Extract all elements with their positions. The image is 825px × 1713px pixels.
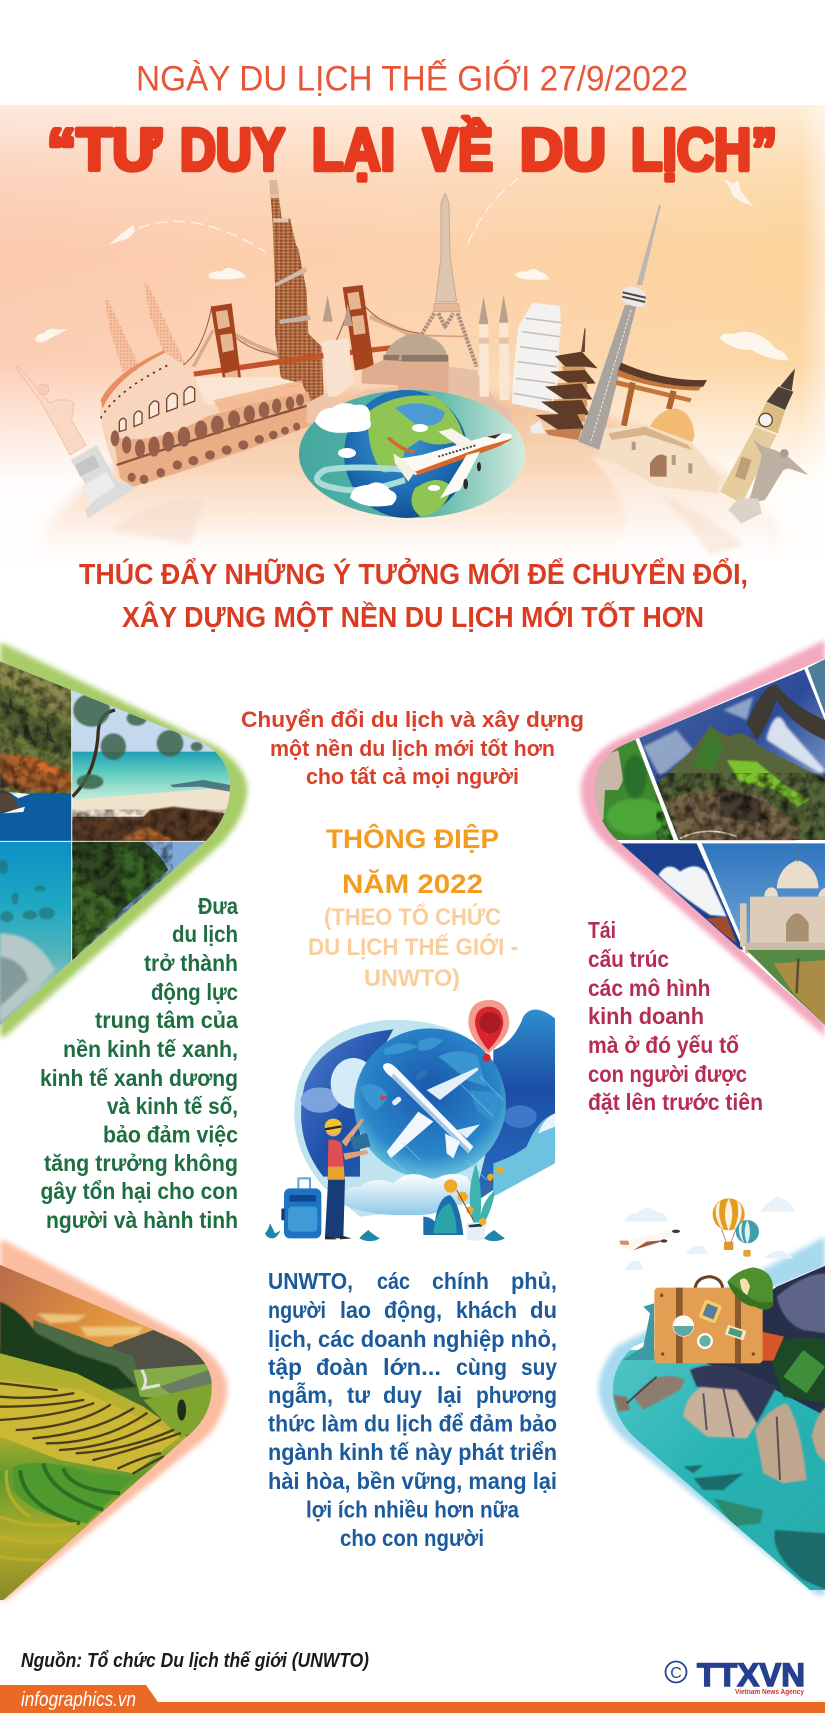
icon: globe with airplane <box>299 390 525 518</box>
icon: clouds left <box>35 268 246 342</box>
text: green economy message: trung tâm của <box>95 1007 238 1033</box>
text: UNWTO attribution <box>308 903 518 992</box>
submerged reef <box>683 1465 825 1590</box>
text: green economy message: tăng trưởng không <box>44 1150 238 1176</box>
title: main slogan: LỊCH” <box>631 117 777 183</box>
clouds <box>315 403 440 506</box>
line 1: các <box>377 1268 410 1294</box>
photo collage <box>0 662 230 1025</box>
clouds behind globe <box>301 1058 537 1128</box>
green chevron border <box>0 643 247 1037</box>
line 4: tập <box>268 1354 302 1380</box>
logo: TTXVN <box>666 1657 805 1696</box>
line 4: suy <box>521 1354 557 1380</box>
line 5: duy <box>383 1382 422 1408</box>
blue chevron border <box>598 1237 825 1595</box>
icon: red map pin <box>468 1000 509 1062</box>
icon: small airplane <box>619 1230 681 1252</box>
photo: Machu Picchu <box>638 668 825 840</box>
line 2 <box>268 1297 557 1323</box>
swirl dark blue <box>301 1029 393 1177</box>
photo: coral reef aerial <box>0 842 72 1028</box>
landmark: Hagia Sophia left side <box>307 295 420 423</box>
text: business model message: cấu trúc <box>588 946 669 972</box>
line 5: phương <box>476 1382 557 1408</box>
text: red headline message <box>241 707 584 789</box>
tagline: Vietnam News Agency <box>735 1687 805 1696</box>
heading: message 2022: THÔNG ĐIỆP <box>326 824 499 854</box>
rock texture <box>72 810 232 842</box>
icon: suitcase with stickers <box>623 1277 784 1363</box>
heading: message 2022 <box>326 824 499 899</box>
continents <box>368 395 464 516</box>
terraces <box>0 1353 187 1600</box>
suitcase <box>281 1178 321 1238</box>
text: business model message: kinh doanh <box>588 1003 704 1029</box>
line 7: ngành kinh tế này phát triển <box>268 1439 557 1465</box>
landmark: Petronas towers <box>105 283 187 372</box>
line 2: người <box>268 1297 326 1323</box>
text: business model message: đặt lên trước tiên <box>588 1089 763 1115</box>
text: UNWTO attribution: DU LỊCH THẾ GIỚI - <box>308 933 518 961</box>
ruin texture <box>657 773 825 840</box>
dark rocks top <box>705 1266 825 1414</box>
granite boulders <box>613 1365 825 1483</box>
panel: top-right landmarks photo collage <box>580 640 825 1040</box>
green lower terraces <box>13 1463 133 1523</box>
text: green economy message: động lực <box>151 979 238 1005</box>
mountains <box>112 1330 212 1386</box>
line 1: UNWTO, <box>268 1268 353 1294</box>
upper right photo sliver <box>808 659 825 714</box>
photo: temple with greenery <box>595 739 674 840</box>
photo collage <box>595 658 825 1025</box>
landmark: Golden Gate bridge <box>183 285 420 401</box>
white slanted gap <box>635 738 678 840</box>
line 10: cho con người <box>340 1525 484 1551</box>
forest <box>0 1302 137 1390</box>
text: green economy message: nền kinh tế xanh, <box>63 1036 238 1062</box>
photo: beach and trees <box>71 690 230 842</box>
line 5 <box>268 1381 557 1408</box>
title: main slogan: VỀ <box>423 117 493 183</box>
photo texture <box>0 662 72 794</box>
landmark: Japanese pagoda <box>536 328 598 440</box>
line 2: động, <box>384 1297 442 1323</box>
line 9: lợi ích nhiều hơn nữa <box>306 1496 519 1522</box>
traveller figure <box>325 1118 371 1239</box>
valley <box>133 1363 213 1403</box>
heading: message 2022: NĂM 2022 <box>342 869 483 899</box>
title: main slogan: LẠI <box>312 117 395 183</box>
line 4 <box>268 1354 557 1380</box>
upper terraces yellow field <box>0 1380 180 1473</box>
planet ground <box>12 388 812 852</box>
palm foliage <box>767 1338 825 1403</box>
wave background <box>473 1010 555 1203</box>
footer bar <box>0 1685 825 1713</box>
text: UNWTO attribution: (THEO TỔ CHỨC <box>324 903 501 931</box>
line 4: lớn... <box>383 1354 441 1380</box>
orange band <box>0 1685 825 1713</box>
text: red headline message: Chuyển đổi du lịch và xây dựng <box>241 707 584 732</box>
white collage gaps <box>0 690 206 962</box>
landmark: Christ the Redeemer <box>728 440 808 523</box>
plant and flowers <box>423 1163 504 1241</box>
line 5: ngẫm, <box>268 1381 333 1408</box>
text: green economy message: trở thành <box>144 950 238 976</box>
pink chevron border <box>581 640 825 1037</box>
text: business model message: các mô hình <box>588 975 710 1001</box>
landmarks right group <box>398 178 808 523</box>
icon: hot air balloons <box>713 1198 759 1257</box>
landmark: torii gate <box>616 363 707 427</box>
icon: copyright: C <box>670 1665 682 1682</box>
text: UNWTO attribution: UNWTO) <box>364 965 460 992</box>
photo: sea cliffs <box>0 640 72 841</box>
text: green economy message: bảo đảm việc <box>103 1122 238 1148</box>
landmark: Eiffel Tower <box>405 193 477 367</box>
line 2: khách <box>456 1297 517 1323</box>
photo: forest hillside <box>70 842 205 960</box>
heading: subtitle: THÚC ĐẨY NHỮNG Ý TƯỞNG MỚI ĐỂ CHUYỂN ĐỔI, <box>79 558 748 591</box>
text: business model message: Tái <box>588 917 616 943</box>
photo <box>0 1265 212 1600</box>
hero panel: landmarks around globe <box>0 105 825 852</box>
website label: infographics.vn <box>21 1689 136 1711</box>
swirl background <box>294 1020 493 1217</box>
text: business model message <box>588 917 763 1115</box>
continents <box>360 1038 500 1123</box>
landmark: Burj Khalifa <box>269 180 324 408</box>
icon: dashed flight path and plane left <box>108 221 265 252</box>
line 1: chính <box>432 1268 489 1294</box>
text: red headline message: cho tất cả mọi người <box>306 764 519 789</box>
text: green economy message: người và hành tinh <box>46 1207 238 1233</box>
text: green economy message: và kinh tế số, <box>107 1093 238 1119</box>
landmark: Statue of Liberty <box>16 367 138 518</box>
landmark: Colosseum <box>100 350 317 487</box>
heading: subtitle <box>79 558 748 634</box>
teal oval background <box>299 390 525 518</box>
text: business model message: mà ở đó yếu tố <box>588 1032 739 1058</box>
landmark: CN Tower <box>578 205 661 450</box>
line 1 <box>268 1268 557 1294</box>
location flag <box>381 1095 388 1101</box>
panel: bottom-left rice terrace photo <box>0 1230 233 1600</box>
text: green economy message <box>40 893 238 1233</box>
line 6: thức làm du lịch để đảm bảo <box>268 1410 557 1436</box>
title: main slogan: “TƯ <box>47 117 161 183</box>
text: business model message: con người được <box>588 1061 747 1087</box>
landmark: Dome of the Rock <box>598 408 720 493</box>
panel: bottom-right island photo <box>590 1190 825 1595</box>
text: green economy message: gây tổn hại cho con <box>40 1178 238 1204</box>
heading: subtitle: XÂY DỰNG MỘT NỀN DU LỊCH MỚI TỐT HƠN <box>122 601 704 634</box>
line 5: tư <box>347 1382 370 1408</box>
icon: dashed flight path and plane right <box>468 178 753 244</box>
line 2: du <box>530 1297 557 1323</box>
title: date line: NGÀY DU LỊCH THẾ GIỚI 27/9/2022 <box>136 58 688 98</box>
title: main slogan <box>47 117 777 183</box>
sunset sky <box>0 1265 188 1347</box>
line 5: lại <box>437 1382 462 1408</box>
earth <box>344 390 468 518</box>
line 3: lịch, các doanh nghiệp nhỏ, <box>268 1326 557 1352</box>
rock cracks <box>627 1377 780 1480</box>
bottom clouds <box>340 1174 477 1215</box>
photo <box>612 1265 825 1590</box>
terrace contour lines <box>0 1383 180 1473</box>
text: green economy message: du lịch <box>172 921 238 947</box>
icon: pale clouds <box>624 1197 796 1270</box>
right pale cloud <box>538 1113 555 1133</box>
panel: top-left nature photo collage <box>0 640 247 1040</box>
orange chevron border <box>0 1240 227 1600</box>
line 4: cùng <box>456 1354 507 1380</box>
globe <box>354 1028 506 1178</box>
line 4: đoàn <box>316 1354 368 1380</box>
landmark: Big Ben <box>720 368 795 503</box>
turquoise water <box>612 1350 825 1590</box>
white slanted gap right <box>804 667 825 725</box>
landmarks left group <box>16 180 420 518</box>
illustration: traveller, globe and airplane <box>265 1000 555 1241</box>
line 8: hài hòa, bền vững, mang lại <box>268 1468 557 1494</box>
text: green economy message: kinh tế xanh dương <box>40 1065 238 1091</box>
airplane <box>383 1063 503 1180</box>
ground tufts <box>265 1223 505 1241</box>
wordmark: TTXVN <box>697 1657 805 1693</box>
text: green economy message: Đưa <box>198 893 238 919</box>
title: main slogan: DU <box>520 117 606 183</box>
title: main slogan: DUY <box>180 117 285 183</box>
landmark: Hagia Sophia right side and minarets <box>398 295 512 423</box>
text: source note: Nguồn: Tổ chức Du lịch thế giới (UNWTO) <box>21 1650 369 1672</box>
icon: green hat <box>727 1267 773 1310</box>
text: blue body paragraph <box>268 1268 557 1551</box>
line 1: phủ, <box>511 1268 557 1294</box>
right lower wave <box>493 1113 555 1197</box>
orbit ring <box>317 468 410 490</box>
photo: Taj Mahal <box>702 843 825 1027</box>
line 2: lao <box>340 1297 371 1323</box>
text: red headline message: một nền du lịch mới tốt hơn <box>270 736 555 761</box>
sky gradient <box>0 105 825 575</box>
airplane <box>387 428 512 498</box>
photo: red fort under cloudy sky <box>613 843 743 950</box>
landmark: Tower of Pisa <box>512 303 562 433</box>
icon: clouds right <box>514 269 788 361</box>
forest texture <box>72 842 172 962</box>
